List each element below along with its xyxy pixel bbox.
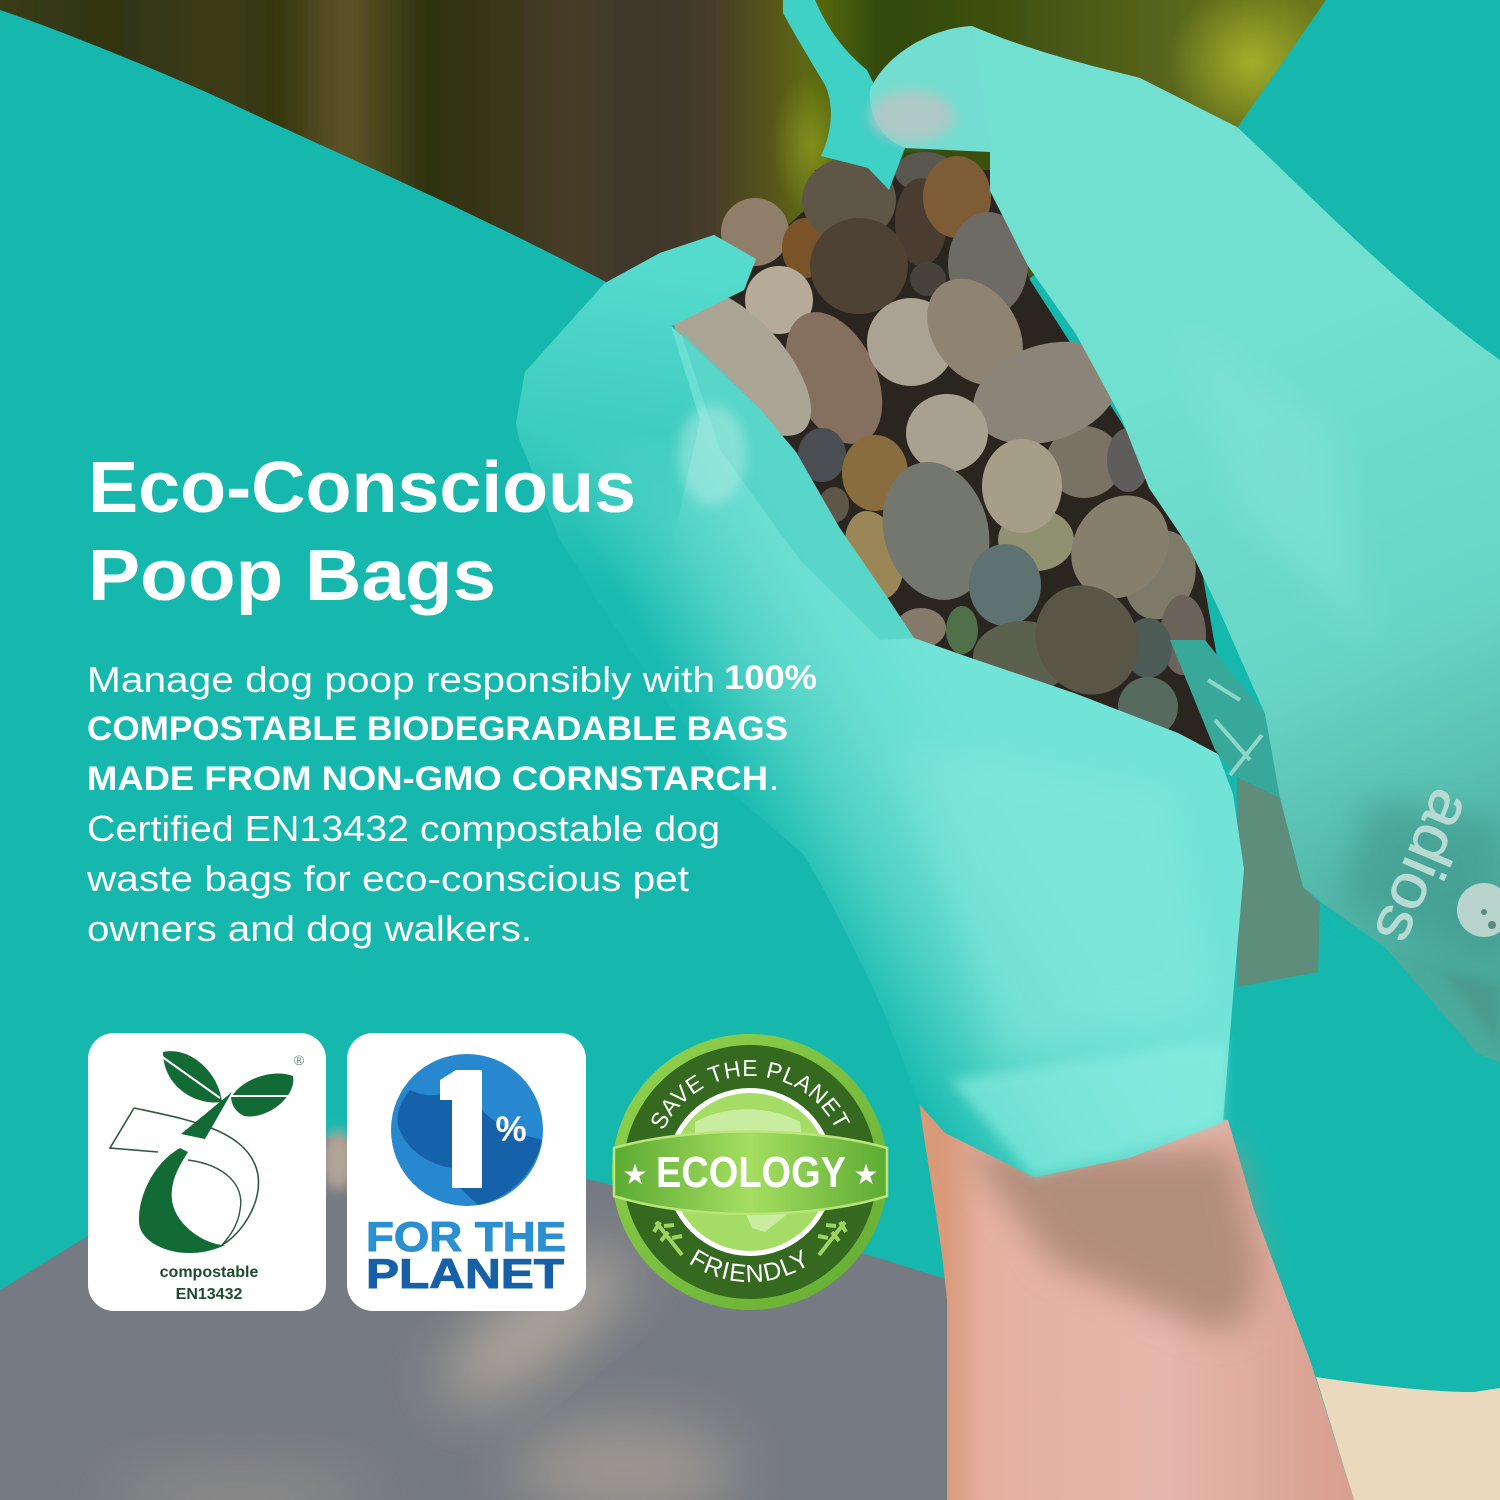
description text: Manage dog poop responsibly with bbox=[87, 659, 715, 700]
description text: waste bags for eco-conscious pet bbox=[86, 858, 689, 899]
bag: hanging strap bbox=[783, 0, 905, 190]
badge: ecology seal: ECOLOGY bbox=[656, 1148, 846, 1197]
badge: ecology seal: ★ bbox=[853, 1159, 879, 1190]
background photo: blurred foliage bbox=[0, 0, 1326, 282]
shadow under glove bbox=[1237, 777, 1500, 1063]
badge: 1% for the planet: % bbox=[495, 1110, 527, 1149]
badge: compostable seedling bbox=[88, 1033, 326, 1311]
description text: MADE FROM NON-GMO CORNSTARCH bbox=[87, 760, 768, 798]
badge: ecology seal: SAVE THE PLANET bbox=[652, 1060, 850, 1128]
badge: compostable seedling: EN13432 bbox=[176, 1286, 242, 1303]
title bbox=[88, 448, 636, 616]
bag: main glove body bbox=[516, 235, 1244, 1177]
title: Eco-Conscious bbox=[88, 448, 636, 528]
title: Poop Bags bbox=[88, 536, 496, 616]
description text: COMPOSTABLE BIODEGRADABLE BAGS bbox=[87, 710, 788, 748]
bag: large right flap bbox=[972, 26, 1500, 1063]
description text bbox=[86, 659, 817, 949]
description text: owners and dog walkers. bbox=[87, 908, 532, 949]
badge: 1% for the planet: FOR THE bbox=[366, 1213, 566, 1260]
badge: compostable seedling: compostable bbox=[160, 1264, 258, 1281]
rocks pile bbox=[649, 152, 1235, 760]
badge: 1% for the planet bbox=[347, 1033, 586, 1311]
badge: ecology seal: ★ bbox=[622, 1159, 648, 1190]
badge: compostable seedling: ® bbox=[294, 1052, 305, 1068]
description text: 100% bbox=[724, 659, 817, 697]
bag: knot bbox=[870, 26, 1005, 152]
arm and hand bbox=[919, 1100, 1354, 1500]
background photo: sand bbox=[1316, 1377, 1500, 1500]
background photo: grey pavement bbox=[0, 1130, 955, 1500]
badge: ecology seal bbox=[612, 1034, 888, 1310]
description text: . bbox=[769, 757, 779, 798]
description text: Certified EN13432 compostable dog bbox=[87, 808, 720, 849]
bag: printed inner strip bbox=[1170, 640, 1280, 798]
bag print: adios logo: adios bbox=[1361, 780, 1487, 954]
badge: 1% for the planet: PLANET bbox=[366, 1250, 564, 1297]
bag print: paw circle bbox=[1457, 883, 1500, 937]
badge: ecology seal: FRIENDLY bbox=[690, 1249, 805, 1282]
